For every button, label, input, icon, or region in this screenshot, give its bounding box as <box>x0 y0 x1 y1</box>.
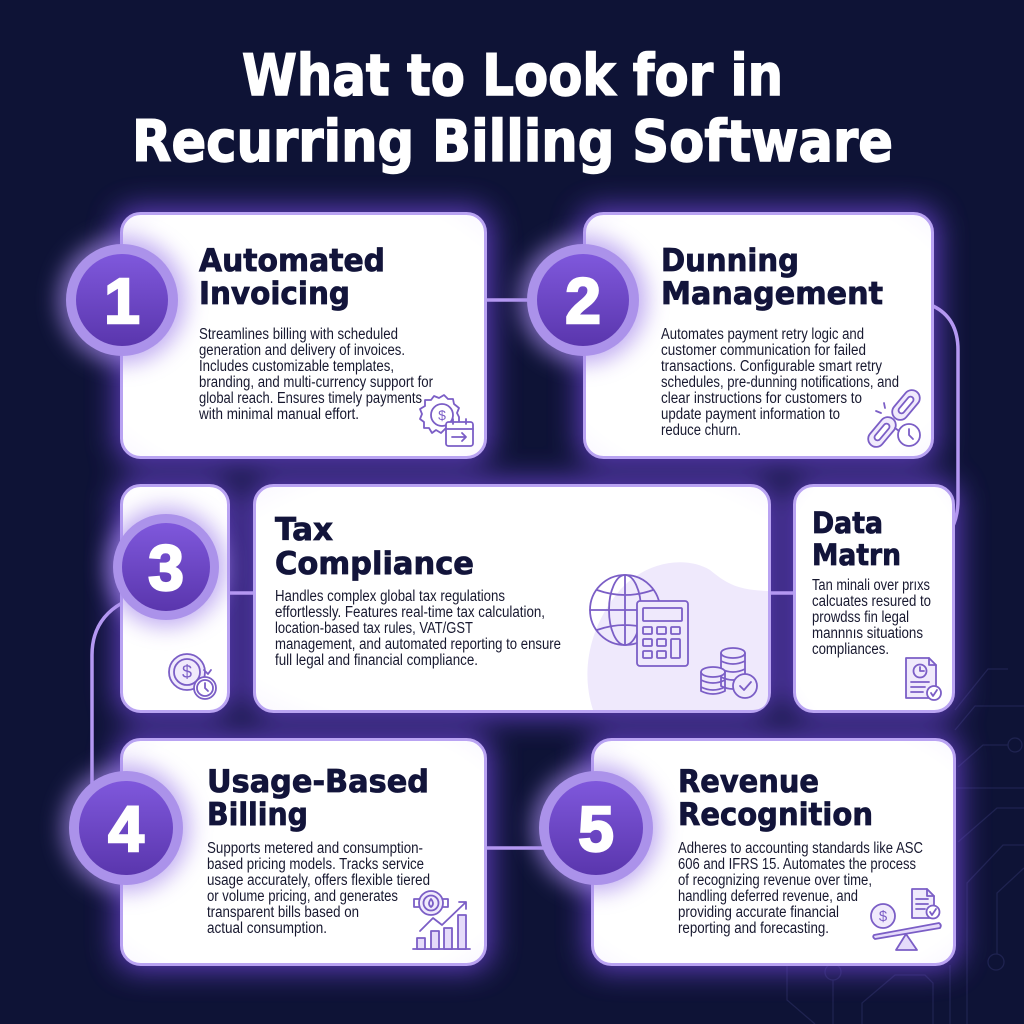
text block: effortlessly. Features real-time tax calculation, <box>275 604 545 621</box>
text block: customer communication for failed <box>661 342 866 359</box>
badge 2 <box>519 236 647 364</box>
text block: management, and automated reporting to ensure <box>275 636 561 653</box>
panel: usage-based billing <box>122 740 486 964</box>
text block: generation and delivery of invoices. <box>199 342 405 359</box>
heading: Matrn <box>812 538 901 572</box>
panel: automated invoicing <box>122 214 486 458</box>
connector: 3 to tax <box>229 591 254 595</box>
panel: data card <box>794 486 954 712</box>
text block: Includes customizable templates, <box>199 358 394 375</box>
panel: dunning management <box>584 214 932 458</box>
icon: document and check <box>906 658 941 700</box>
text block: prowdss fin legal <box>812 609 909 626</box>
text block: branding, and multi-currency support for <box>199 374 433 391</box>
text block: actual consumption. <box>207 920 327 937</box>
heading <box>812 506 901 572</box>
icon: globe and calculator <box>590 575 688 666</box>
text block: based pricing models. Tracks service <box>207 856 424 873</box>
text block: transparent bills based on <box>207 904 359 921</box>
heading: Automated <box>199 243 385 279</box>
badge 1: 1 <box>104 265 140 337</box>
heading: Management <box>661 276 883 312</box>
decorative blob <box>587 562 768 710</box>
heading: Billing <box>207 797 308 833</box>
heading: Revenue <box>678 764 819 800</box>
text block: global reach. Ensures timely payments <box>199 390 422 407</box>
badge 1 <box>58 236 186 364</box>
heading <box>678 764 873 833</box>
text block: with minimal manual effort. <box>198 406 359 423</box>
text block: location-based tax rules, VAT/GST <box>275 620 473 637</box>
text block: update payment information to <box>661 406 840 423</box>
badge 4 <box>62 764 190 892</box>
text block: Tan minali over prıxs <box>812 577 930 594</box>
badge 5: 5 <box>578 793 614 865</box>
text block: clear instructions for customers to <box>661 390 862 407</box>
text block: compliances. <box>812 641 889 658</box>
badge 5 <box>532 764 660 892</box>
icon: gear and calendar <box>420 395 473 446</box>
icon: broken chain and clock <box>865 387 923 450</box>
title <box>132 43 893 175</box>
connector: 3 to 4 <box>92 603 122 785</box>
connector: tax to data <box>770 591 794 595</box>
panel: revenue recognition <box>592 740 954 964</box>
text block <box>678 840 923 937</box>
text block: Streamlines billing with scheduled <box>199 326 398 343</box>
badge 3 <box>106 507 226 627</box>
icon: dollar and clock <box>169 654 216 699</box>
text block: reduce churn. <box>661 422 741 439</box>
text block: full legal and financial compliance. <box>275 652 478 669</box>
text block <box>661 326 899 439</box>
badge 4: 4 <box>108 793 144 865</box>
icon: coins and check <box>701 648 757 698</box>
connector: 2 to data card <box>933 306 958 528</box>
badge 2: 2 <box>565 265 601 337</box>
text block: mannnıs situations <box>812 625 923 642</box>
heading: Invoicing <box>199 276 350 312</box>
text block <box>275 588 561 669</box>
text block: providing accurate financial <box>678 904 839 921</box>
icon: dollar and clock: $ <box>182 662 192 682</box>
title: What to Look for in <box>242 43 783 109</box>
icon: balance scale <box>871 889 941 950</box>
heading: Recognition <box>678 797 873 833</box>
panel: tax compliance <box>254 486 770 712</box>
heading <box>199 243 385 312</box>
text block: handling deferred revenue, and <box>678 888 858 905</box>
heading: Usage-Based <box>207 764 429 800</box>
text block: Automates payment retry logic and <box>661 326 864 343</box>
text block: Adheres to accounting standards like ASC <box>678 840 923 857</box>
text block: usage accurately, offers flexible tiered <box>207 872 430 889</box>
icon: gear and calendar: $ <box>438 407 446 423</box>
text block: calcuates resured to <box>812 593 931 610</box>
icon: balance scale: $ <box>879 908 888 925</box>
heading <box>207 764 429 833</box>
text block <box>207 840 430 937</box>
text block <box>812 577 931 658</box>
text block: transactions. Configurable smart retry <box>661 358 882 375</box>
heading: Tax <box>275 512 333 548</box>
connector: 4 to 5 <box>486 846 550 850</box>
title: Recurring Billing Software <box>132 109 893 175</box>
text block: schedules, pre-dunning notifications, and <box>661 374 899 391</box>
heading: Dunning <box>661 243 799 279</box>
text block: of recognizing revenue over time, <box>678 872 872 889</box>
text block: 606 and IFRS 15. Automates the process <box>678 856 916 873</box>
text block: or volume pricing, and generates <box>207 888 398 905</box>
text block: Supports metered and consumption- <box>207 840 423 857</box>
badge 3: 3 <box>148 532 184 604</box>
heading: Data <box>812 506 883 540</box>
text block <box>198 326 433 423</box>
heading: Compliance <box>275 546 474 582</box>
connector: 1 to 2 <box>486 298 540 302</box>
panel: narrow card 3 <box>122 486 228 712</box>
icon: meter and bar chart <box>413 891 470 949</box>
heading <box>661 243 883 312</box>
text block: Handles complex global tax regulations <box>275 588 505 605</box>
heading <box>275 512 474 582</box>
text block: reporting and forecasting. <box>678 920 829 937</box>
